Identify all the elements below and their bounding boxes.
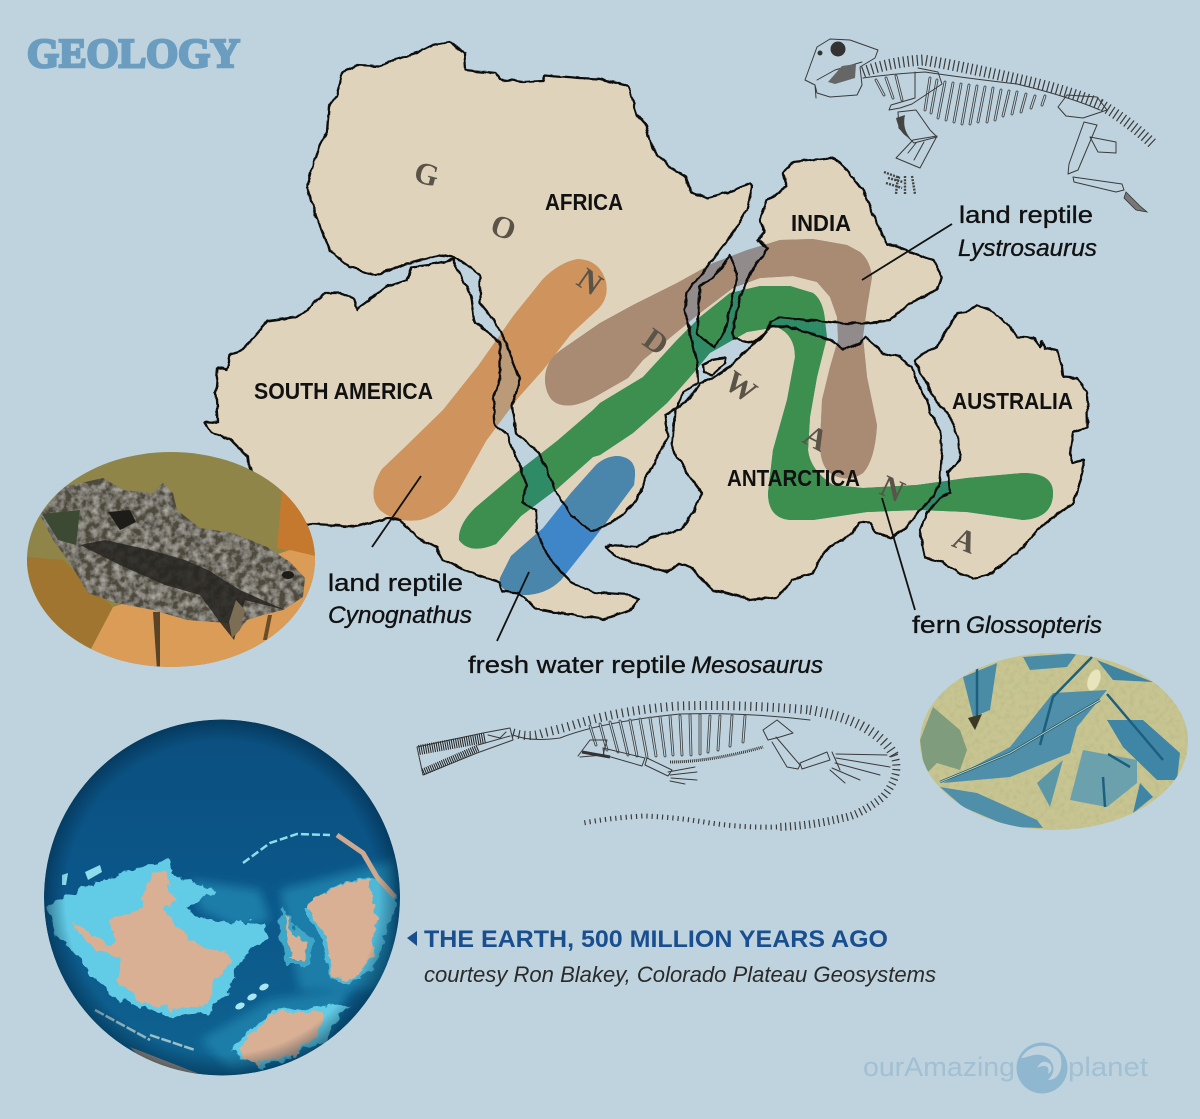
caption: Glossopteris: Glossopteris (966, 612, 1102, 639)
word: GONDWANA across the map: A (798, 417, 835, 459)
leader line: Mesosaurus (497, 572, 529, 641)
continent labels: AFRICA (545, 189, 623, 215)
word: GONDWANA across the map: A (948, 520, 982, 561)
continent labels: ANTARCTICA (727, 465, 860, 491)
caption: Cynognathus (328, 570, 472, 629)
continent labels: SOUTH AMERICA (254, 378, 433, 404)
caption: Earth 500 million years ago: THE EARTH, 500 MILLION YEARS AGO (424, 926, 888, 953)
southern rim land (130, 1047, 197, 1074)
caption: Cynognathus: land reptile (328, 570, 463, 597)
map: Gondwana supercontinent (205, 42, 1088, 619)
continents: land fill (205, 42, 1088, 619)
caption: Lystrosaurus (958, 202, 1097, 262)
fossil band: Glossopteris (459, 286, 1053, 549)
southern island chains (95, 1010, 195, 1050)
word: GONDWANA across the map: D (637, 321, 675, 362)
caption: Mesosaurus: fresh water reptile (468, 652, 686, 679)
continent labels (254, 189, 1073, 491)
caption: Mesosaurus: Mesosaurus (691, 652, 823, 679)
continental shelf: main landmass (47, 860, 267, 1017)
continent labels: AUSTRALIA (952, 388, 1073, 414)
caption arrow (407, 931, 417, 946)
caption: Glossopteris: fern (912, 612, 961, 639)
word: GONDWANA across the map: N (875, 468, 910, 509)
word: GONDWANA across the map: W (718, 363, 764, 410)
caption: Cynognathus: Cynognathus (328, 602, 472, 629)
word: GONDWANA across the map: N (571, 261, 609, 302)
logo: ourAmazingPlanet (863, 1042, 1149, 1094)
fossil band: Lystrosaurus (545, 239, 877, 478)
logo: ourAmazingPlanet: planet (1068, 1052, 1149, 1082)
fossil band: Cynognathus (373, 259, 607, 521)
credit line: courtesy Ron Blakey, Colorado Plateau Geosystems (424, 962, 936, 987)
ocean (44, 720, 400, 1076)
title: GEOLOGY (27, 30, 240, 76)
logo: ourAmazingPlanet: ourAmazing (863, 1052, 1015, 1082)
word: GONDWANA across the map (411, 154, 982, 561)
land: northern strip (337, 835, 395, 897)
southern landmass (237, 1012, 323, 1065)
small landmass shelf (277, 908, 313, 965)
caption: Mesosaurus (468, 652, 823, 679)
caption: Lystrosaurus: land reptile (959, 202, 1093, 229)
globe: Earth 500 million years ago (44, 720, 400, 1078)
globe edge shading (44, 720, 400, 1076)
continent outlines (205, 42, 1088, 619)
islands (235, 984, 269, 1010)
land: main landmass (70, 870, 233, 1010)
southern landmass shelf (230, 1005, 347, 1067)
photo: Cynognathus skull (27, 452, 320, 670)
leader line: Lystrosaurus (862, 224, 952, 280)
caption: Lystrosaurus: Lystrosaurus (958, 235, 1097, 262)
shallow seas (190, 860, 395, 1070)
island arc (243, 834, 330, 863)
continental shelf: east landmass (307, 877, 397, 983)
photo: Glossopteris fossil (920, 653, 1188, 830)
leader line: Glossopteris (882, 498, 915, 610)
shelf islets (62, 865, 102, 885)
fossil band: Mesosaurus (500, 456, 635, 595)
word: GONDWANA across the map: O (486, 207, 521, 248)
leader line: Cynognathus (372, 476, 421, 547)
illustration: Mesosaurus skeleton (417, 706, 896, 827)
small landmass (285, 913, 307, 960)
continent labels: INDIA (791, 210, 851, 236)
illustration: Lystrosaurus skeleton (805, 39, 1153, 212)
word: GONDWANA across the map: G (411, 154, 443, 194)
land: east landmass (310, 880, 377, 980)
